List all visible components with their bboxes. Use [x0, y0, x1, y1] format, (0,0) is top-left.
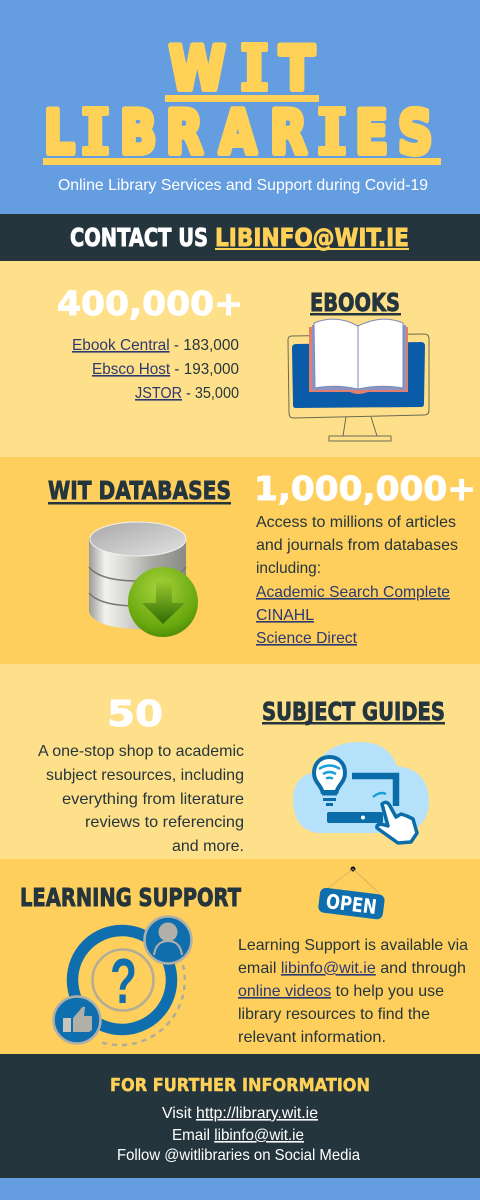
footer links: Email libinfo@wit.ie — [172, 1127, 304, 1144]
title: WIT: WIT — [169, 34, 314, 104]
ebook sources list — [72, 337, 239, 402]
learning support description: relevant information. — [238, 1029, 386, 1046]
icon: monitor with open book — [288, 319, 429, 441]
icon: cloud with bulb, tablet and hand — [293, 742, 429, 843]
contact email: LIBINFO@WIT.IE — [215, 223, 409, 252]
databases description: Access to millions of articles — [256, 514, 456, 531]
databases description: Academic Search Complete — [256, 584, 450, 601]
panel: databases — [0, 457, 480, 664]
panel: footer — [0, 1054, 480, 1178]
heading: WIT DATABASES: WIT DATABASES — [48, 476, 231, 505]
stat: 400,000+: 400,000+ — [57, 284, 243, 323]
ebook sources list: Ebsco Host - 193,000 — [92, 361, 239, 378]
databases description: and journals from databases — [256, 537, 458, 554]
subject guides description: A one-stop shop to academic — [38, 743, 244, 760]
databases description: CINAHL — [256, 607, 314, 624]
learning support description: email libinfo@wit.ie and through — [238, 960, 466, 977]
panel: contact bar — [0, 214, 480, 261]
stat: 50: 50 — [107, 694, 163, 735]
panel: title header — [0, 0, 480, 214]
title: LIBRARIES: LIBRARIES — [44, 98, 433, 167]
learning support description: online videos to help you use — [238, 983, 444, 1000]
footer heading: FOR FURTHER INFORMATION — [110, 1075, 370, 1096]
icon: question ring with person and thumbs up: ? — [110, 945, 137, 1017]
panel: subject guides — [0, 664, 480, 859]
ebook sources list: JSTOR - 35,000 — [135, 385, 239, 402]
databases description: Science Direct — [256, 630, 358, 647]
subject guides description: reviews to referencing — [85, 814, 244, 831]
learning support description — [238, 937, 468, 1046]
icon: open sign: OPEN — [325, 889, 378, 919]
subtitle: Online Library Services and Support during Covid-19 — [58, 177, 428, 194]
panel: bottom band — [0, 1178, 480, 1200]
icon: open sign — [318, 866, 385, 920]
learning support description: Learning Support is available via — [238, 937, 468, 954]
heading: EBOOKS: EBOOKS — [310, 288, 400, 317]
icon: database with download arrow — [89, 522, 198, 637]
databases description — [256, 514, 458, 647]
subject guides description: subject resources, including — [46, 767, 244, 784]
footer links: Visit http://library.wit.ie — [162, 1105, 318, 1122]
footer links — [117, 1105, 360, 1164]
subject guides description: everything from literature — [62, 791, 244, 808]
learning support description: library resources to find the — [238, 1006, 430, 1023]
databases description: including: — [256, 560, 321, 577]
footer links: Follow @witlibraries on Social Media — [117, 1147, 360, 1164]
contact heading: CONTACT US — [70, 223, 208, 252]
subject guides description — [38, 743, 244, 855]
subject guides description: and more. — [172, 838, 244, 855]
panel: learning support — [0, 859, 480, 1054]
heading: LEARNING SUPPORT: LEARNING SUPPORT — [20, 883, 241, 912]
panel: ebooks — [0, 261, 480, 457]
icon: question ring with person and thumbs up — [54, 916, 192, 1045]
ebook sources list: Ebook Central - 183,000 — [72, 337, 239, 354]
stat: 1,000,000+: 1,000,000+ — [254, 469, 476, 508]
